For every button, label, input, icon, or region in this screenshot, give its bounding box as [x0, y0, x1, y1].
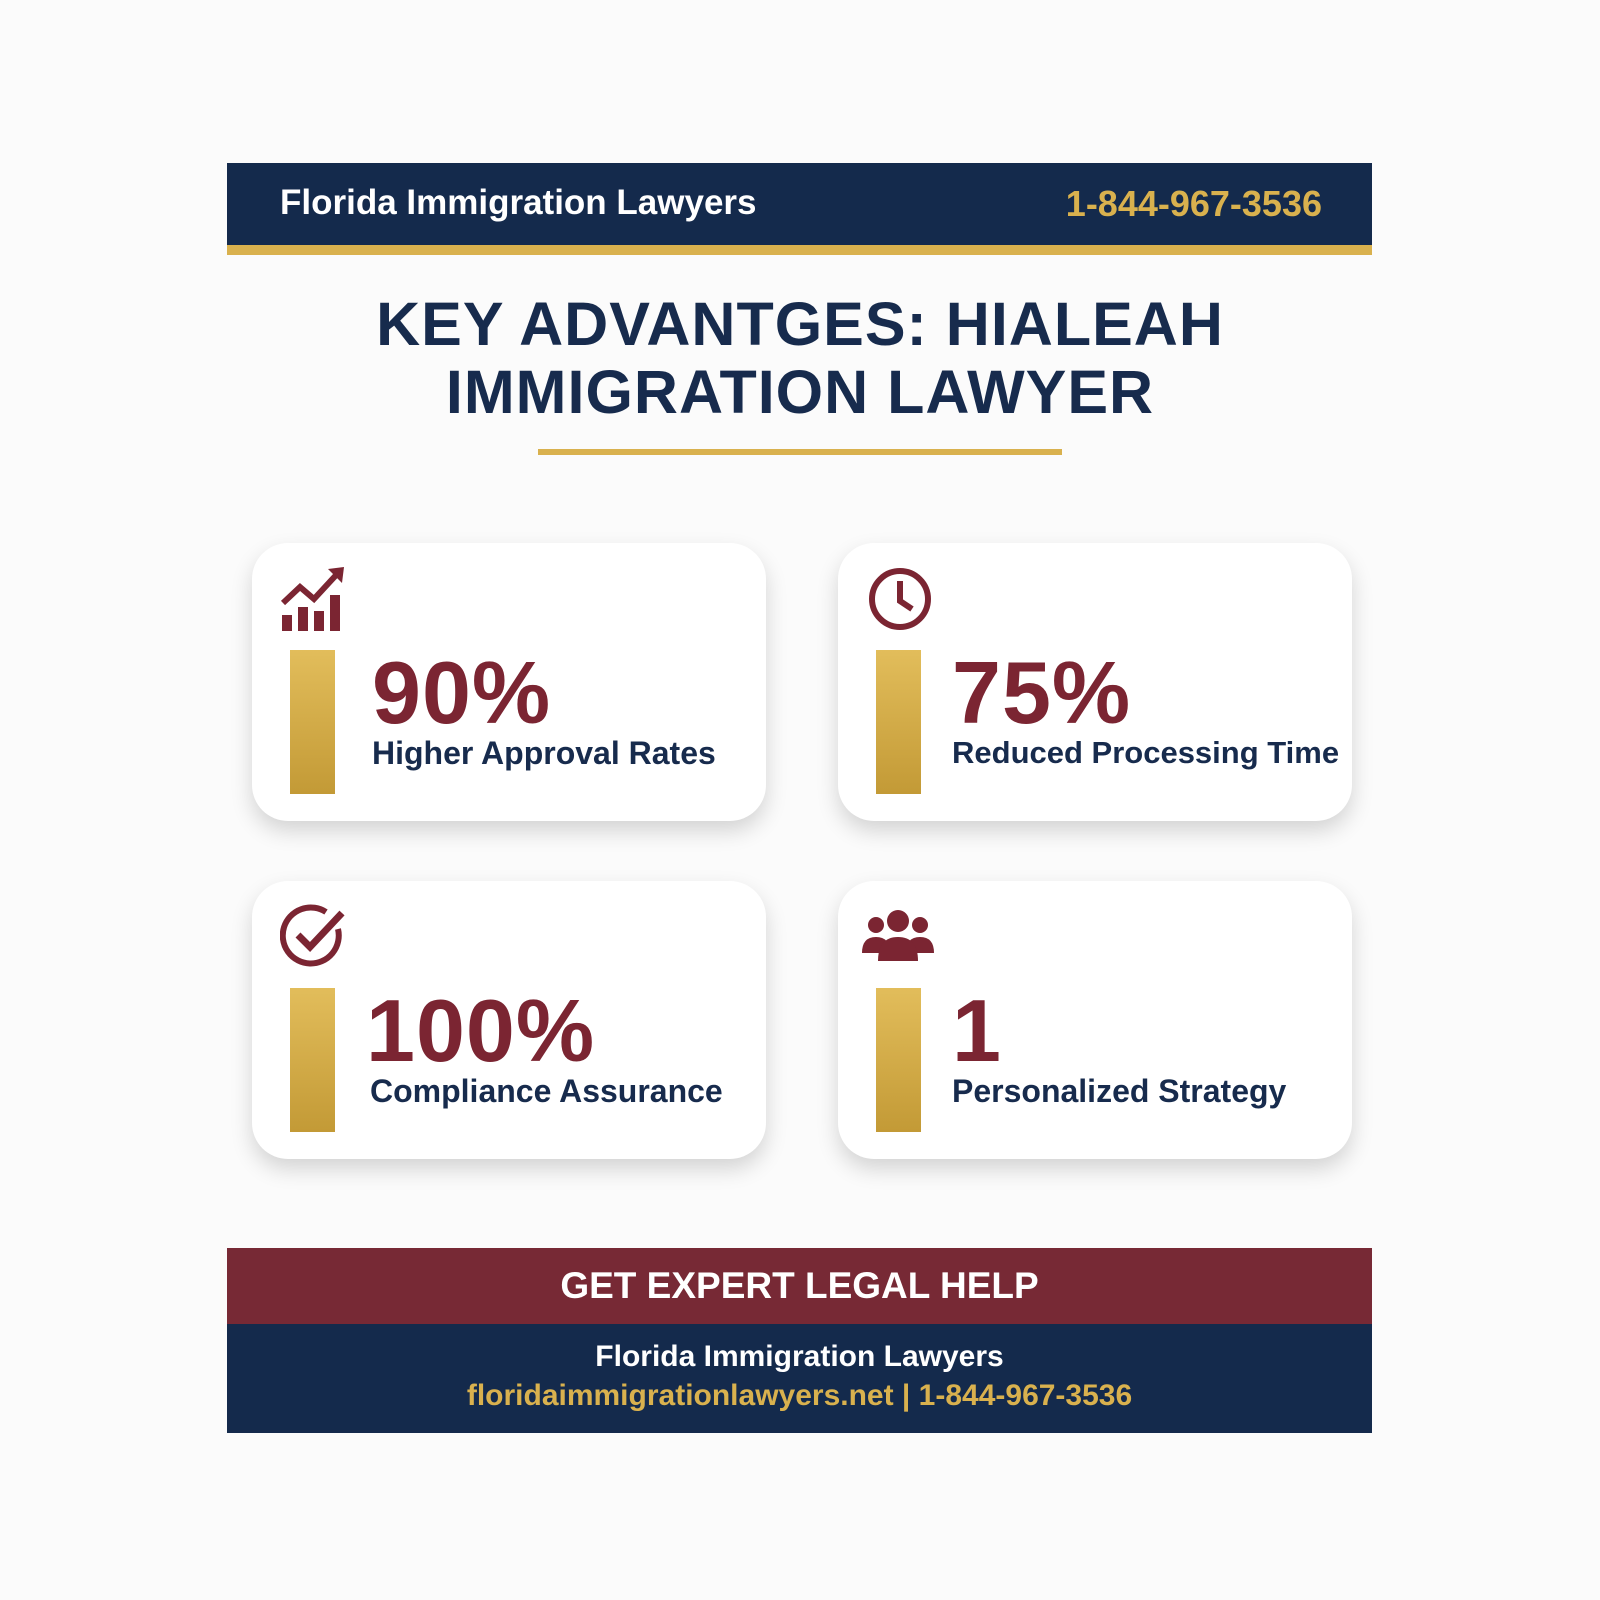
card: approval rates	[252, 543, 766, 821]
contact block: floridaimmigrationlawyers.net | 1-844-967-3536	[467, 1379, 1132, 1412]
stat 1: 1	[952, 981, 1002, 1080]
stat 90%: 90%	[372, 643, 551, 742]
label: Reduced Processing Time	[952, 735, 1339, 770]
stat 75%: 75%	[952, 643, 1131, 742]
title: KEY ADVANTGES: HIALEAH	[376, 290, 1224, 358]
label: Personalized Strategy	[952, 1073, 1286, 1109]
icon: clock	[869, 568, 931, 630]
header phone: 1-844-967-3536	[1066, 183, 1322, 224]
title underline	[538, 449, 1062, 455]
contact block	[227, 1324, 1372, 1433]
contact block: Florida Immigration Lawyers	[595, 1340, 1004, 1373]
header firm name: Florida Immigration Lawyers	[280, 183, 756, 222]
label: Compliance Assurance	[370, 1073, 723, 1109]
icon: people	[862, 910, 934, 961]
header bar	[227, 163, 1372, 255]
card: compliance	[252, 881, 766, 1159]
footer cta	[227, 1248, 1372, 1433]
label: Higher Approval Rates	[372, 735, 716, 771]
title	[376, 290, 1224, 426]
card: strategy	[838, 881, 1352, 1159]
stat 100%: 100%	[366, 981, 595, 1080]
icon: growth chart	[281, 567, 344, 631]
title: IMMIGRATION LAWYER	[446, 358, 1154, 426]
cta heading	[227, 1248, 1372, 1324]
card: processing time	[838, 543, 1352, 821]
cta heading: GET EXPERT LEGAL HELP	[560, 1265, 1039, 1306]
icon: check circle	[280, 904, 344, 966]
